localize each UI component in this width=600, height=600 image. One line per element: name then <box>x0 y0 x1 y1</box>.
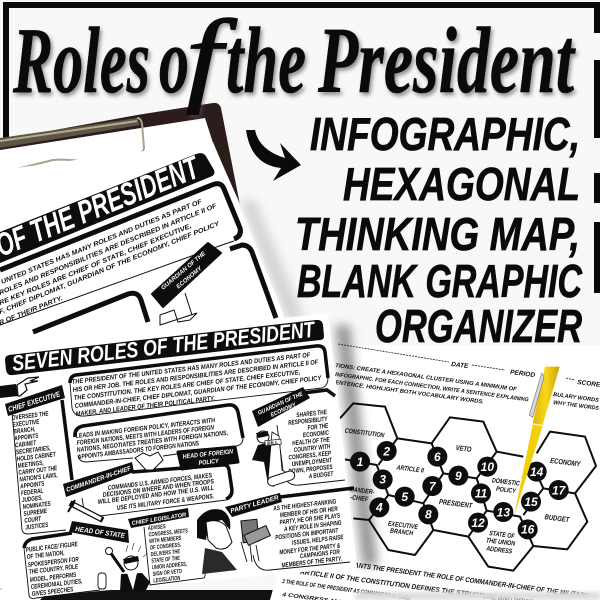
title shadow: the <box>228 12 308 116</box>
intro box: HIS OR HER JOB. THE ROLES AND RESPONSIBILITIES ARE DESCRIBED IN ARTICLE II OF <box>72 359 319 394</box>
panel: head of state: CEREMONIAL DUTIES, <box>30 579 83 591</box>
label: head of state: HEAD OF STATE <box>75 526 125 540</box>
instructions <box>335 363 599 412</box>
label: chief executive: CHIEF EXECUTIVE <box>7 389 62 414</box>
node numbers: 16 <box>521 523 535 537</box>
hexagon labels: STATE OF <box>489 531 515 540</box>
panel: guardian of the economy: FOR THE <box>307 423 329 432</box>
sheet guardian box: GUARDIAN OF THE <box>160 251 207 292</box>
label: head of foreign policy: HEAD OF FOREIGN <box>182 449 233 461</box>
numbered nodes <box>350 441 569 539</box>
label: guardian of the economy: GUARDIAN OF THE <box>257 391 304 417</box>
hexagon labels: DOMESTIC <box>491 478 521 488</box>
panel: chief legislator: ADVISES <box>148 523 166 532</box>
title: Roles <box>12 9 150 113</box>
title shadow: Roles <box>14 12 152 116</box>
label: head of foreign policy <box>178 447 238 469</box>
title: the <box>226 9 306 113</box>
icon: handshake <box>135 452 163 470</box>
hexagon labels: EXECUTIVE <box>387 521 419 531</box>
panel: guardian of the economy <box>252 387 345 487</box>
instructions: TIONS: CREATE A HEXAGONAL CLUSTER USING A MINIMUM OF <box>335 363 518 393</box>
panel: head of state: SPOKESPERSON FOR <box>27 557 80 569</box>
panel: head of state: MODEL, PERFORMS <box>29 572 77 584</box>
intro box: MAKER, AND LEADER OF THEIR POLITICAL PARTY. <box>75 395 215 418</box>
panel: chief legislator: OF CONGRESS, <box>150 542 181 552</box>
icon: sword <box>68 500 103 520</box>
label: guardian of the economy <box>252 387 310 427</box>
panel: guardian of the economy: DOWN, PROPOSES <box>288 464 333 476</box>
panel: party leader <box>225 488 354 570</box>
node numbers: 17 <box>552 483 567 497</box>
panel: party leader: AS THE HIGHEST-RANKING <box>272 499 337 513</box>
panel: chief legislator: CONGRESS, MEETS <box>148 528 189 539</box>
panel: party leader: CAMPAIGNS FOR <box>300 549 341 561</box>
title shadow: o <box>161 12 191 116</box>
shadow: first sheet <box>240 200 305 320</box>
intro box <box>70 346 328 418</box>
node numbers: 6 <box>434 450 441 464</box>
panel: head of foreign policy: LEADS IN MAKING FOREIGN POLICY, INTERACTS WITH <box>75 417 216 440</box>
panel: chief legislator: SIGN OR VETO <box>152 568 182 578</box>
panel: guardian of the economy: A BUDGET <box>308 471 334 481</box>
sheet name, date, score line <box>338 344 600 389</box>
hexagon labels: MANDER- <box>349 487 375 496</box>
panel: head of state: GIVES SPEECHES <box>31 587 74 598</box>
sheet guardian box: ECONOMY <box>176 265 204 290</box>
label: party leader: PARTY LEADER <box>230 494 280 515</box>
node numbers: 9 <box>455 469 462 483</box>
node numbers: 1 <box>357 455 364 469</box>
panel: chief executive: CARRY OUT THE <box>18 465 58 477</box>
panel: party leader: MEMBERS OF THE PARTY. <box>281 556 343 570</box>
panel: chief executive: NOMINATES <box>22 501 51 511</box>
sheet name, date, score line: PERIOD <box>510 369 536 379</box>
panel: chief legislator: LEGISLATION <box>153 575 181 585</box>
hexagon cluster <box>340 367 596 571</box>
hexagon labels: ADDRESS <box>485 546 512 556</box>
worksheet: front infographic sheet <box>0 313 357 599</box>
node numbers: 12 <box>471 516 485 530</box>
panel: head of state <box>24 521 150 599</box>
sheet guardian box <box>152 243 276 325</box>
label: guardian of the economy: ECONOMY <box>270 402 298 419</box>
panel: chief legislator: WITH MEMBERS <box>149 535 182 545</box>
panel: party leader: MEMBER OF HIS OR HER <box>280 506 339 520</box>
panel: chief legislator <box>128 508 237 585</box>
panel: chief legislator: UNION ADDRESS, <box>152 561 187 572</box>
node numbers: 8 <box>425 508 432 522</box>
intro box: THE PRESIDENT OF THE UNITED STATES HAS MANY ROLES AND DUTIES AS PART OF <box>71 352 312 386</box>
panel: chief executive: COURT <box>24 516 42 525</box>
panel: chief executive: MEETINGS, <box>17 460 44 470</box>
node numbers: 5 <box>401 490 408 504</box>
shadow: front sheet <box>335 325 378 566</box>
hexagon labels: -CHIEF <box>350 495 369 504</box>
panel: head of foreign policy: APPOINTS AMBASSADORS TO FOREIGN NATIONS <box>77 440 200 461</box>
panel: commander-in-chief: USE ITS MILITARY FORCE & WEAPONS. <box>116 493 215 512</box>
panel: head of foreign policy: FOREIGN NATIONS, MEETS WITH LEADERS OF FOREIGN <box>76 424 215 447</box>
title shadow: f <box>188 1 240 118</box>
icon: hands with money <box>241 519 270 562</box>
panel: guardian of the economy: RESPONSIBILITY <box>288 416 329 427</box>
instructions: BULARY WORDS <box>553 392 599 404</box>
panel: guardian of the economy: COUNTRY WITH <box>294 444 332 454</box>
panel: party leader: MONEY FOR THE PARTY & <box>279 543 341 557</box>
worksheet: back infographic sheet <box>0 142 300 590</box>
panel: head of state: PUBLIC FACE/ FIGURE <box>25 542 78 554</box>
panel: chief legislator: STATE OF THE <box>151 555 181 565</box>
frame border <box>3 2 600 293</box>
panel: chief executive: BRANCH, <box>13 426 36 436</box>
hexagon labels: BRANCH <box>390 528 414 538</box>
node numbers: 7 <box>429 479 437 493</box>
icon: man holding bill: BILL <box>267 440 279 447</box>
sheet intro box: F, CHIEF DIPLOMAT, GUARDIAN OF THE ECONOMY, CHIEF POLICY <box>0 220 221 316</box>
arrow <box>246 130 301 181</box>
node numbers: 3 <box>379 473 386 487</box>
node numbers: 11 <box>475 487 488 501</box>
title: o <box>159 9 189 113</box>
panel: chief executive: FEDERAL <box>21 488 44 498</box>
title: f <box>186 0 238 115</box>
label: chief legislator: CHIEF LEGISLATOR <box>131 512 187 527</box>
panel: chief executive: NATION'S LAWS, <box>19 472 58 484</box>
panel: chief executive: APPOINTS <box>19 481 45 491</box>
panel: chief executive: JUSTICES <box>25 522 49 532</box>
hexagon labels: THE UNION <box>486 538 516 548</box>
hexagon labels: VETO <box>455 445 473 454</box>
title <box>12 0 576 115</box>
instructions: ENTENCE. HIGHLIGHT BOTH VOCABULARY WORDS. <box>335 380 485 406</box>
panel: commander-in-chief: DECISIONS ON WHERE AND WHEN TROOPS <box>102 478 215 499</box>
intro box: THE CONSTITUTION. THE KEY ROLES ARE CHIEF OF STATE, CHIEF EXECUTIVE, <box>73 369 301 402</box>
panel: guardian of the economy: UNEMPLOYMENT <box>291 457 333 469</box>
yellow pen <box>514 367 560 516</box>
sheet lower left box <box>33 293 148 332</box>
icon: pointing hand <box>0 377 39 398</box>
title shadow <box>14 1 578 118</box>
worksheet: hexagonal thinking map <box>270 325 600 600</box>
node numbers: 4 <box>375 501 383 515</box>
panel: guardian of the economy: HEALTH OF THE <box>292 437 330 448</box>
icon: woman <box>197 509 237 574</box>
panel: commander-in-chief: WILL BE DEPLOYED AND HOW THE U.S. WILL <box>97 485 214 506</box>
sheet name, date, score line: SCORE <box>577 379 600 389</box>
panel: head of foreign policy: NATIONS, NEGOTIATES TREATIES WITH FOREIGN NATIONS, <box>76 430 228 454</box>
sheet intro box: RE KEY ROLES ARE CHIEF OF STATE, CHIEF EXECUTIVE, <box>0 223 193 307</box>
label: head of foreign policy: POLICY <box>198 459 220 467</box>
hexagon labels <box>344 428 581 556</box>
subtitle text <box>295 108 583 352</box>
sheet lower left fragments <box>0 398 30 590</box>
panel: commander-in-chief <box>63 462 232 520</box>
node numbers <box>357 444 567 537</box>
label: commander-in-chief: COMMANDER-IN-CHIEF <box>65 465 133 494</box>
hexagon labels: POLICY <box>496 486 517 496</box>
panel: commander-in-chief: COMMANDS U.S. ARMED FORCES, MAKES <box>107 472 213 492</box>
panel: party leader: PARTY, HE OR SHE PLAYS <box>279 513 341 527</box>
hexagon labels: ECONOMY <box>550 457 581 469</box>
sheet intro box: ROLES AND RESPONSIBILITIES ARE DESCRIBED IN ARTICLE II OF <box>0 202 219 297</box>
panel: chief executive: APPOINTS <box>13 433 39 443</box>
hexagon labels: ARTICLE II <box>395 465 424 475</box>
sheet header band <box>0 149 214 263</box>
panel: chief executive <box>5 385 72 534</box>
sheet name, date, score line: DATE <box>451 361 469 370</box>
node numbers: 10 <box>481 460 494 474</box>
intro box: COMMANDER-IN-CHIEF, CHIEF DIPLOMAT, GUARDIAN OF THE ECONOMY, CHIEF POLICY <box>74 375 322 410</box>
sheet intro box <box>0 184 240 327</box>
header band: SEVEN ROLES OF THE PRESIDENT <box>11 317 317 376</box>
panel: party leader: A KEY ROLE IN SHAPING <box>283 520 342 534</box>
hexagon labels: PRESIDENT <box>438 498 473 510</box>
panel: guardian of the economy: CONGRESS, KEEP <box>288 451 332 462</box>
panel: guardian of the economy: ECONOMIC <box>303 430 330 440</box>
hexagon labels: BUDGET <box>544 514 570 524</box>
node numbers: 15 <box>524 495 538 509</box>
bottom fade <box>355 592 600 600</box>
panel: head of state: OF THE NATION, <box>26 550 65 561</box>
panel: chief executive: JUDGES, <box>22 495 43 504</box>
node numbers: 2 <box>382 444 390 458</box>
panel: chief executive: HOLDS CABINET <box>16 452 57 463</box>
panel: head of foreign policy <box>75 405 243 470</box>
panel: party leader: POSITIONS ON IMPORTANT <box>275 528 339 542</box>
panel: chief executive: EXECUTIVE <box>12 419 40 429</box>
panel: chief legislator: DELIVERS THE <box>150 548 181 559</box>
panel: chief executive: SECRETARIES, <box>16 445 51 457</box>
hexagon outlines <box>340 403 596 571</box>
node numbers: 14 <box>530 465 544 479</box>
hexagon labels: CONSTITUTION <box>344 428 385 440</box>
panel: head of state: THE COUNTRY, ROLE <box>28 564 79 576</box>
instructions: INFOGRAPHIC. FOR EACH CONNECTION, WRITE A SENTENCE EXPLAINING <box>335 372 529 404</box>
panel: chief executive: OVERSEES THE <box>11 411 49 422</box>
panel: guardian of the economy: SHARES THE <box>296 409 327 419</box>
panel: party leader: ISSUES, HELPS RAISE <box>292 534 344 547</box>
sheet intro box: UNITED STATES HAS MANY ROLES AND DUTIES AS PART OF <box>0 198 204 286</box>
node numbers: 13 <box>497 505 510 519</box>
panel: chief executive: SUPREME <box>23 508 48 518</box>
panel: chief executive: CABINET <box>15 440 37 450</box>
icon: waving man at microphone <box>98 543 150 592</box>
